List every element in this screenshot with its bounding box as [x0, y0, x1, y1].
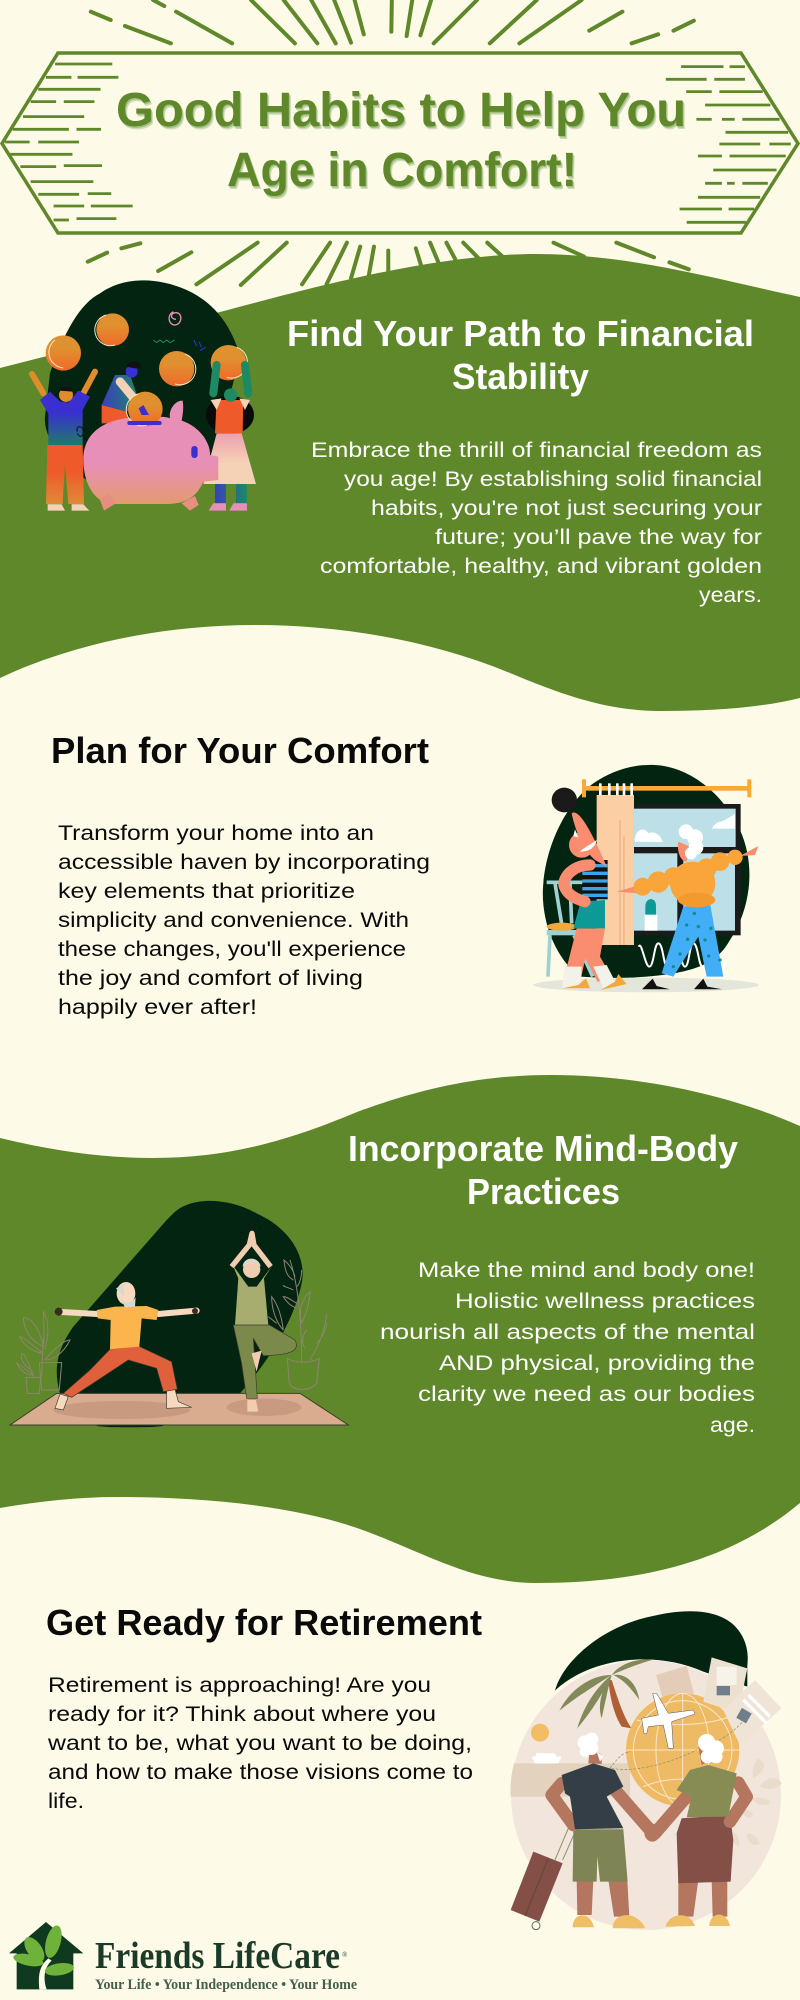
text block: financial stability: you age! By establishing solid financial [344, 468, 762, 491]
text block: plan for your comfort: simplicity and convenience. With [58, 909, 409, 932]
text block: mind-body practices: Make the mind and body one! [418, 1259, 755, 1282]
text block: plan for your comfort: these changes, you'll experience [58, 938, 406, 961]
text block: get ready for retirement: life. [48, 1790, 84, 1813]
text block: mind-body practices: AND physical, providing the [439, 1352, 755, 1375]
text block: mind-body practices: age. [710, 1414, 755, 1437]
title banner [2, 53, 798, 233]
title text: Age in Comfort! [227, 144, 577, 197]
illustration: home stretching couple [533, 765, 759, 992]
heading: mind-body practices: Practices [467, 1171, 620, 1212]
heading: plan for your comfort: Plan for Your Comfort [51, 730, 429, 771]
text block: get ready for retirement: want to be, what you want to be doing, [47, 1732, 472, 1755]
green wave band: mind-body section [0, 1075, 800, 1583]
illustration: travelling couple and globe [510, 1611, 782, 1930]
heading: mind-body practices [348, 1128, 738, 1212]
text block: mind-body practices: clarity we need as our bodies [418, 1383, 755, 1406]
sun rays below banner [88, 243, 689, 285]
text block: plan for your comfort: key elements that prioritize [58, 880, 355, 903]
text block: mind-body practices: nourish all aspects of the mental [380, 1321, 755, 1344]
heading: mind-body practices: Incorporate Mind-Body [348, 1128, 738, 1169]
text block: plan for your comfort: Transform your home into an [58, 822, 374, 845]
text block: financial stability: future; you’ll pave the way for [435, 526, 762, 549]
logo icon: house with leaves [9, 1922, 83, 1989]
logo: Friends LifeCare: Your Life • Your Independence • Your Home [95, 1977, 358, 1993]
text block: plan for your comfort: accessible haven by incorporating [58, 851, 430, 874]
logo: Friends LifeCare [9, 1922, 358, 1993]
title text: Good Habits to Help You [117, 86, 687, 138]
text block: financial stability: Embrace the thrill of financial freedom as [311, 439, 762, 462]
text block: get ready for retirement: ready for it? Think about where you [48, 1703, 436, 1726]
green wave band: financial section [0, 254, 800, 711]
text block: mind-body practices: Holistic wellness practices [455, 1290, 755, 1313]
title text: Good Habits to Help You [116, 84, 686, 137]
text block: plan for your comfort: the joy and comfort of living [58, 967, 363, 990]
text block: plan for your comfort [58, 822, 430, 1019]
logo: Friends LifeCare: ® [342, 1951, 348, 1959]
title text: Age in Comfort! [228, 146, 578, 198]
heading: financial stability [287, 313, 754, 397]
text block: financial stability [311, 439, 762, 607]
heading: financial stability: Stability [452, 356, 589, 397]
text block: get ready for retirement [47, 1674, 473, 1813]
text block: plan for your comfort: happily ever after! [58, 996, 257, 1019]
text block: get ready for retirement: Retirement is approaching! Are you [48, 1674, 431, 1697]
illustration: piggy bank and coins [32, 280, 256, 511]
text block: financial stability: comfortable, healthy, and vibrant golden [320, 555, 762, 578]
sun rays above banner [91, 0, 694, 43]
title text: Good Habits to Help You [118, 87, 688, 140]
heading: get ready for retirement: Get Ready for Retirement [46, 1602, 482, 1643]
text block: get ready for retirement: and how to make those visions come to [48, 1761, 473, 1784]
logo: Friends LifeCare: Friends LifeCare [95, 1935, 340, 1977]
text block: mind-body practices [380, 1259, 755, 1437]
title text: Age in Comfort! [229, 147, 579, 200]
illustration: yoga couple [10, 1201, 348, 1427]
heading: financial stability: Find Your Path to Financial [287, 313, 754, 354]
title text [116, 84, 688, 200]
text block: financial stability: years. [699, 584, 762, 607]
text block: financial stability: habits, you're not just securing your [371, 497, 762, 520]
